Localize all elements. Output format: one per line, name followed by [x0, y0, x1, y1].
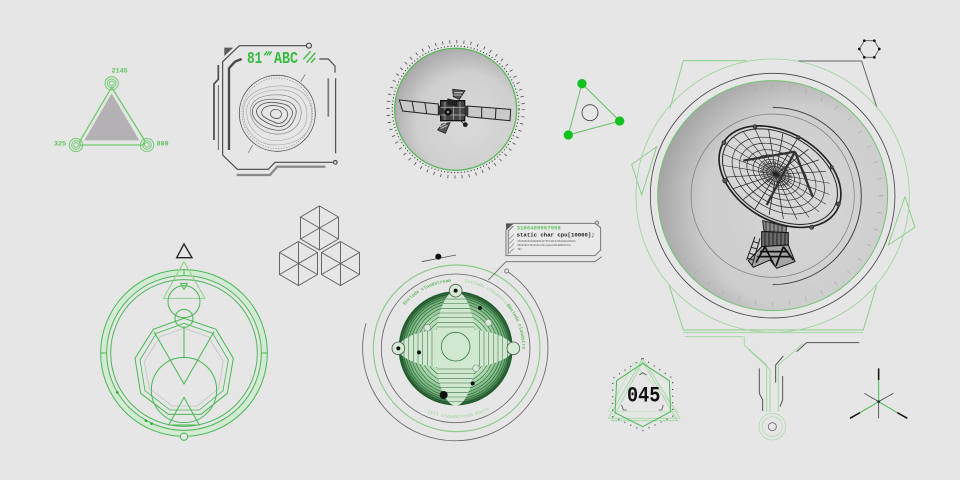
- sphere black dots: [396, 289, 482, 399]
- emblem head circles: [168, 270, 200, 327]
- sphere horizontal lens: [401, 330, 510, 368]
- left cube: [280, 242, 318, 286]
- dial dotted ring: [392, 46, 519, 173]
- callout green number: 3186489567968: [517, 225, 561, 232]
- left solar panel: [399, 100, 438, 115]
- green node triangle: [564, 79, 624, 140]
- dish tower: [747, 221, 795, 268]
- top cube: [300, 206, 338, 250]
- emblem polygon outlines: [135, 318, 233, 414]
- gauge labels: 889: [157, 140, 169, 148]
- gauge top node: [105, 77, 118, 90]
- HUD frame lines: [214, 43, 337, 175]
- gauge green triangle outline: [80, 87, 145, 145]
- callout code line: static char cpu[10000];: [517, 231, 595, 238]
- callout frame: [506, 221, 601, 256]
- gauge labels: [54, 67, 169, 148]
- orbit dot: [422, 254, 456, 262]
- circular labels: Cyll cloudstream Enclo: [428, 408, 489, 418]
- HUD heading 81 ABC: [247, 50, 298, 69]
- dish inner rings: [664, 87, 881, 304]
- circular labels: [402, 279, 526, 418]
- callout small text: [517, 240, 576, 251]
- sphere diagram: [362, 254, 602, 442]
- triangle centre circle: [582, 105, 598, 121]
- hexagon icon: [858, 39, 881, 59]
- satellite antennas: [438, 89, 467, 133]
- radar dish dial: [632, 39, 915, 332]
- green emblem: [101, 244, 268, 440]
- gauge left node: [69, 138, 83, 152]
- HUD heading hatch marks: [264, 51, 315, 63]
- triangle nodes: [564, 79, 624, 140]
- badge green hexagon: [615, 363, 671, 427]
- connector dark lines: [759, 343, 859, 411]
- badge pale triangles: [608, 358, 680, 421]
- sphere white nodes: [392, 284, 520, 372]
- gauge labels: 2145: [112, 67, 128, 75]
- satellite dial: [388, 42, 523, 177]
- dish frame grey lines: [798, 61, 877, 107]
- circular labels: Enclode cloudstream: [402, 279, 451, 305]
- hexagon cube cluster: [280, 206, 360, 286]
- HUD heading 81 ABC: ABC: [274, 50, 298, 69]
- sphere outer rings: [363, 265, 548, 441]
- satellite: [399, 89, 511, 133]
- emblem small dots: [116, 391, 153, 425]
- circular labels: Enclode cloudstream: [465, 279, 511, 309]
- emblem lower circle: [151, 357, 217, 423]
- contour map circle: [239, 74, 315, 153]
- badge brackets: [622, 373, 663, 410]
- sphere vertical lens: [436, 294, 474, 406]
- sphere globe: [392, 284, 520, 406]
- triangle gauge widget: [54, 67, 169, 152]
- three-arm star icon: [850, 368, 907, 418]
- circular labels: Enclode cloudstream: [506, 304, 526, 349]
- sphere centre disc: [441, 332, 470, 361]
- dish connector: [683, 333, 863, 440]
- callout small text: 170498346198038642739746134719820136044: [517, 240, 576, 243]
- radar dish wireframe: [701, 105, 859, 268]
- dish sphere: [658, 81, 888, 311]
- dish dark ring: [650, 73, 895, 318]
- gauge labels: 325: [54, 140, 66, 148]
- emblem inverted triangle: [181, 283, 187, 289]
- satellite body: [438, 98, 468, 121]
- right solar panel: [467, 106, 511, 121]
- gauge grey triangle: [84, 93, 139, 140]
- black triangle icon: [177, 244, 192, 258]
- 045 badge: [608, 358, 680, 431]
- badge dotted hexagon: [613, 358, 673, 431]
- star hub: [877, 400, 880, 403]
- badge number: 045: [627, 384, 660, 409]
- gauge right node: [140, 138, 154, 152]
- emblem bottom node: [180, 433, 188, 440]
- callout corner triangle: [506, 223, 513, 230]
- emblem lower triangle: [169, 397, 199, 425]
- contour map HUD frame: [214, 43, 337, 175]
- HUD corner triangle: [224, 48, 233, 56]
- star thin arms: [864, 393, 893, 418]
- dish outer frame: [632, 61, 915, 330]
- triangle lines: [568, 84, 620, 135]
- dish struts: [743, 152, 813, 205]
- connector end node: [759, 413, 786, 440]
- dish reflector: [701, 105, 859, 248]
- dial tick ring: [388, 42, 523, 177]
- emblem V and stem: [154, 327, 214, 384]
- dish outer pale ring: [636, 59, 909, 332]
- connector pale rails: [683, 333, 863, 412]
- code callout box: [506, 221, 601, 256]
- star black tips: [850, 368, 907, 418]
- emblem pale triangle: [163, 262, 205, 298]
- dial sphere: [395, 48, 517, 170]
- callout small text: 5694588745CAA11c20svgdou00198982154s: [517, 244, 571, 247]
- dish rim knobs: [722, 125, 840, 229]
- right cube: [322, 242, 360, 286]
- callout small text: 784: [517, 248, 522, 251]
- HUD heading 81 ABC: 81: [247, 50, 262, 69]
- callout hatch: [509, 234, 514, 253]
- emblem rings: [101, 270, 268, 436]
- callout leader: [488, 257, 602, 280]
- star green arms: [860, 380, 897, 413]
